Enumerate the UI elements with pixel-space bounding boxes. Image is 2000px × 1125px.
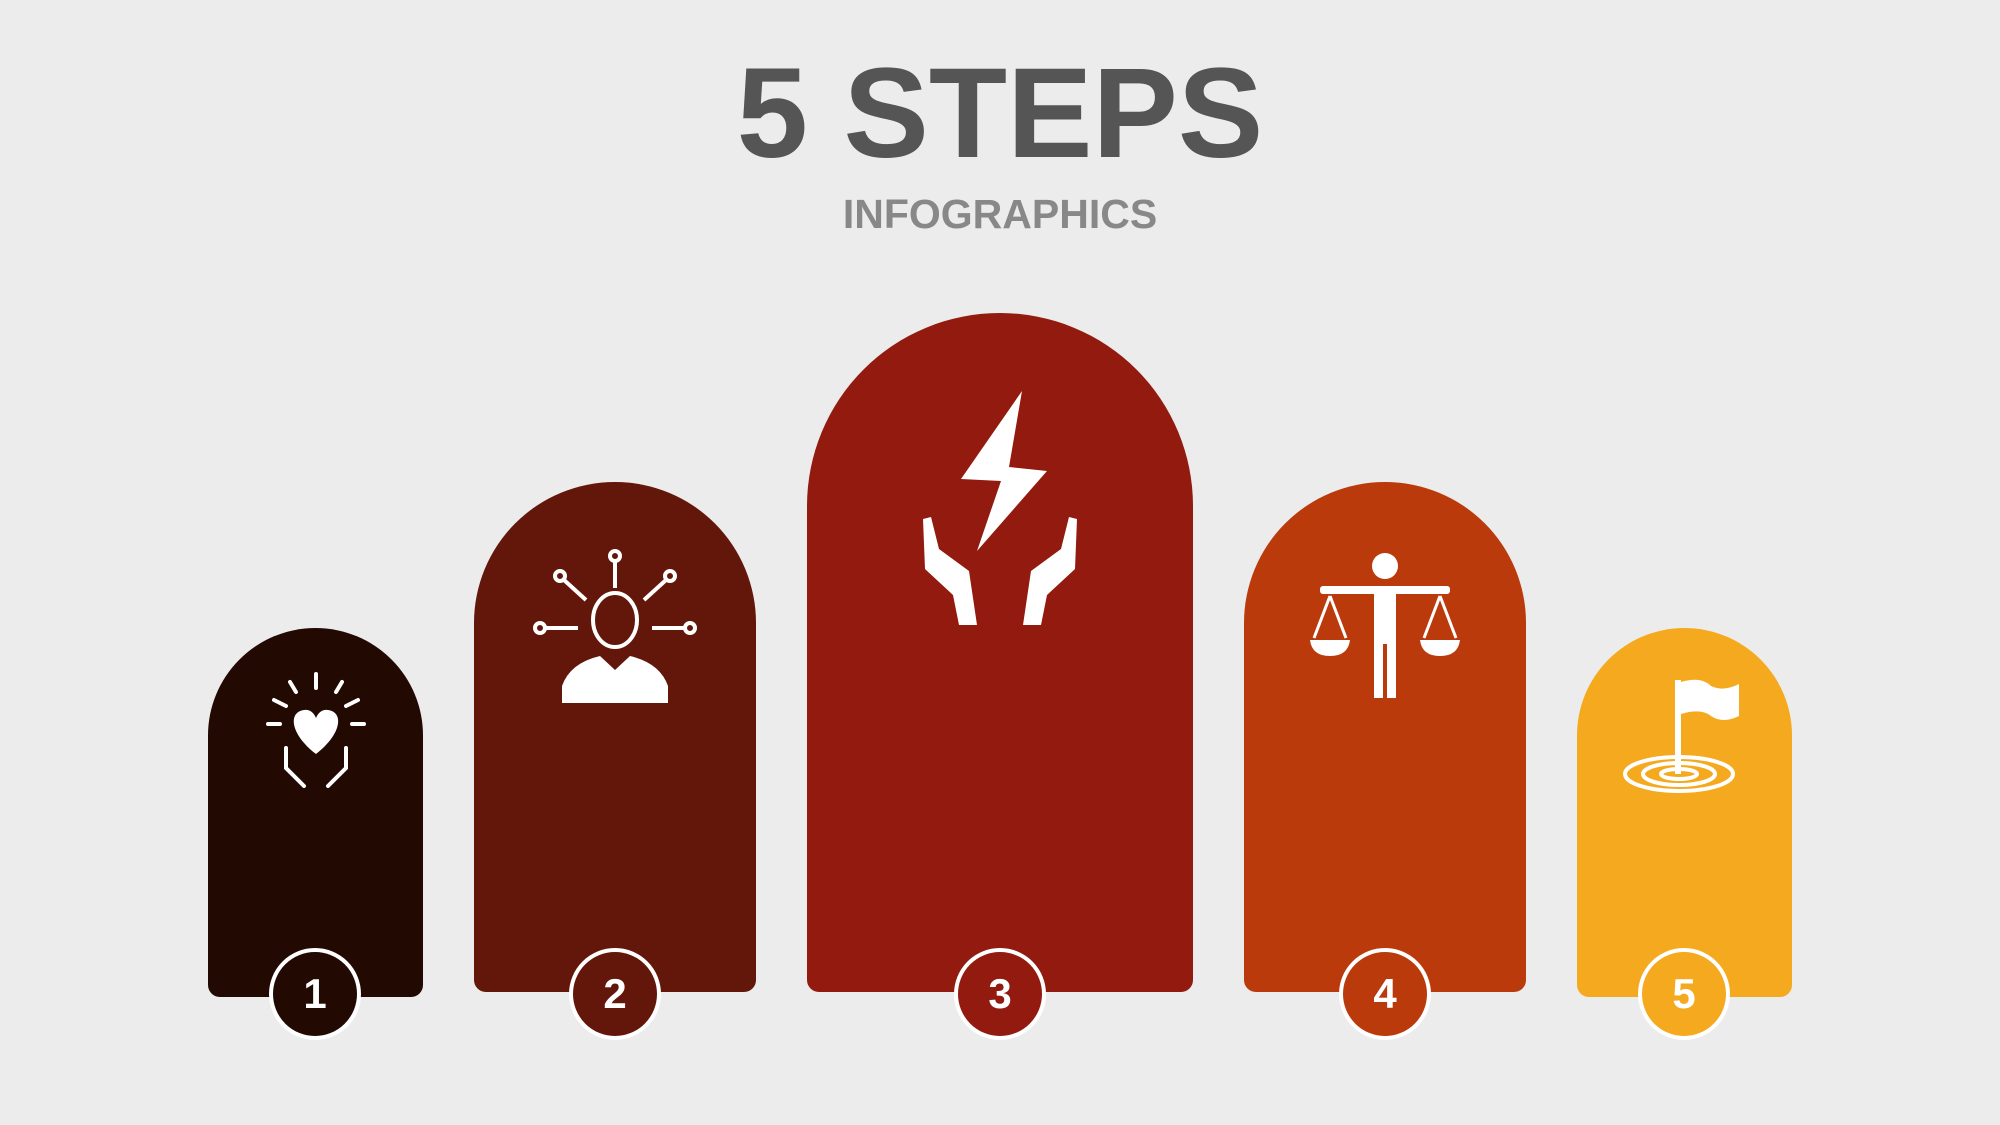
badge 5: 5 (1672, 970, 1696, 1017)
panel: step 3 (807, 313, 1193, 992)
icon: lightning in hands (923, 391, 1077, 625)
badge 2: 2 (603, 970, 627, 1017)
panel: step 2 (474, 482, 756, 992)
badge 4 (1339, 948, 1431, 1040)
panel: step 1 (208, 628, 423, 997)
title: 5 STEPS (737, 42, 1263, 185)
badge 2 (569, 948, 661, 1040)
subtitle: INFOGRAPHICS (843, 191, 1157, 237)
panel: step 5 (1577, 628, 1792, 997)
icon: person with scales (1310, 553, 1460, 698)
icon: heart in hands (266, 672, 366, 788)
panel: step 4 (1244, 482, 1526, 992)
badge 1 (269, 948, 361, 1040)
badge 4: 4 (1373, 970, 1397, 1017)
badge 3: 3 (988, 970, 1012, 1017)
icon: person with network (533, 549, 697, 703)
badge 1: 1 (303, 970, 327, 1017)
badge 3 (954, 948, 1046, 1040)
badge 5 (1638, 948, 1730, 1040)
icon: flag on target (1623, 680, 1739, 793)
